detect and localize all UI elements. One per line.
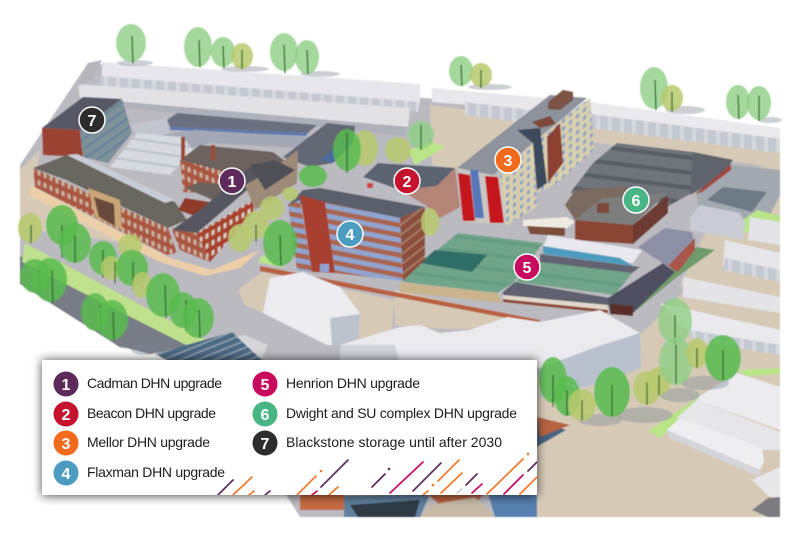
ground: pale sidewalk [196,335,268,358]
tree row behind school and beacon [299,121,434,187]
map marker 3: 3 [504,153,513,170]
map marker 6: 6 [632,193,641,210]
building 5: Henrion [400,228,715,316]
map marker 7: 7 [88,113,97,130]
ground: parking area [690,160,780,235]
lawn patches [258,142,780,438]
map marker 4 [337,221,363,247]
legend item 2: Beacon DHN upgrade [87,405,216,421]
building 7: Blackstone [42,97,132,163]
map marker 6 [623,187,649,213]
legend item 4 [54,460,225,486]
map marker 4: 4 [346,227,355,244]
legend item 2: 2 [62,407,71,424]
legend item 6: 6 [261,407,270,424]
ground: beige plinth under school [30,185,260,276]
map marker 7 [79,107,105,133]
white building bottom right [667,373,780,517]
map marker 3 [495,147,521,173]
building 1: Cadman [33,137,298,262]
brick boundary wall [260,266,540,324]
map marker 5 [514,254,540,280]
map marker 1 [219,168,245,194]
legend item 3: Mellor DHN upgrade [87,434,210,450]
white building left [263,272,360,345]
legend item 2 [54,402,216,426]
building 4: Flaxman [288,188,425,281]
legend item 7: 7 [261,436,270,453]
top terrace rows [78,60,780,153]
building 6: Dwight and SU complex [523,143,767,244]
right terrace blocks [660,217,780,355]
trees: bottom right [539,298,741,421]
legend item 1: 1 [62,377,71,394]
legend item 1: Cadman DHN upgrade [87,375,222,391]
ground: green verge [22,243,215,347]
building below legend [300,417,570,517]
legend item 5: Henrion DHN upgrade [286,375,420,391]
legend item 3 [54,430,210,456]
legend panel [42,360,537,496]
legend item 6 [252,402,517,426]
trees: school avenue [18,205,214,340]
legend item 3: 3 [62,436,71,453]
tree shadows [117,60,782,426]
map marker 2: 2 [403,174,412,191]
legend item 5 [252,372,420,396]
solar car park [155,332,264,362]
map marker 5: 5 [523,260,532,277]
legend decorative diagonal lines [218,453,537,495]
legend item 4: Flaxman DHN upgrade [87,464,225,480]
legend item 7: Blackstone storage until after 2030 [286,434,502,450]
legend item 6: Dwight and SU complex DHN upgrade [286,405,517,421]
ground: white corner [20,272,300,517]
building 3: Mellor [457,90,594,225]
map marker 2 [394,168,420,194]
trees: top row [116,24,771,121]
building 2: Beacon [363,163,460,218]
legend item 1 [54,372,222,396]
ground: beige areas [20,105,780,517]
ground: dark car park road [20,256,195,354]
trees: around Flaxman [228,187,439,266]
legend item 5: 5 [261,377,270,394]
back sheds behind school [110,113,355,175]
legend item 7 [252,430,502,456]
map marker 1: 1 [228,174,237,191]
legend item 4: 4 [62,466,71,483]
white building centre [340,310,641,398]
